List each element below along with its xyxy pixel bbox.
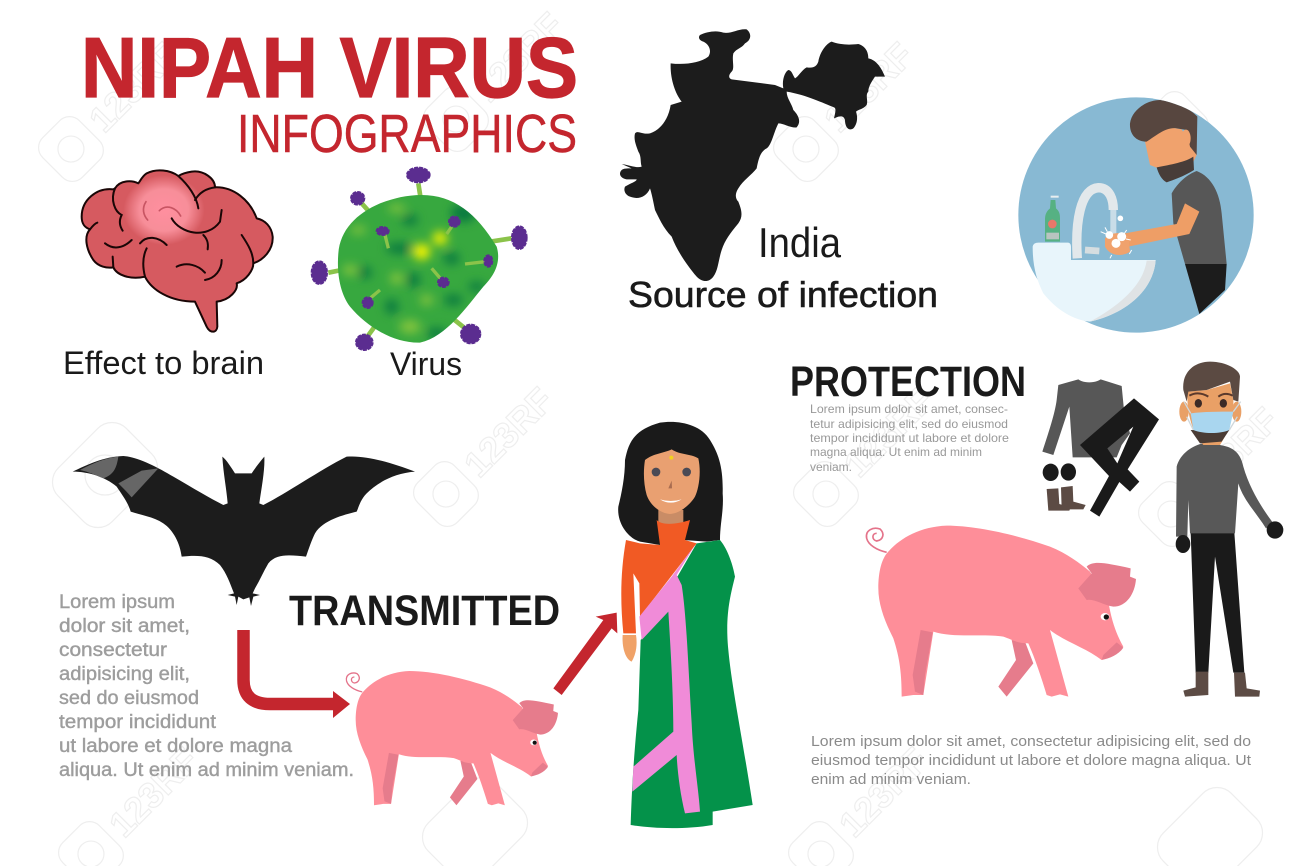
text: transmission description: dolor sit amet,: [59, 616, 190, 637]
soap bottle: [1045, 196, 1060, 242]
heading: protection: PROTECTION: [790, 358, 1026, 406]
virus body: [338, 195, 498, 343]
title: [81, 21, 578, 164]
text: transmission description: [59, 592, 354, 781]
infographic canvas: 123RF: [101, 739, 206, 845]
trousers: [1080, 398, 1159, 517]
arrow: pig to human: [553, 613, 617, 695]
icon: brain: [82, 170, 273, 332]
subheading: Infographics: INFOGRAPHICS: [237, 104, 577, 164]
illustration: man in mask: [1176, 362, 1283, 697]
icon: small pig: [346, 671, 558, 805]
text: bottom description: [811, 734, 1251, 788]
icon: large pig: [866, 526, 1136, 697]
infographic canvas: 123RF: [816, 34, 921, 140]
sweater: [1176, 443, 1273, 537]
text: transmission description: tempor incididunt: [59, 712, 217, 733]
text: protection description: veniam.: [810, 460, 852, 474]
boots: [1047, 486, 1086, 511]
illustration: woman in sari: [618, 422, 753, 828]
foam: [1101, 216, 1132, 258]
infographic canvas: 123RF: [466, 4, 571, 110]
gloves: [1176, 521, 1283, 553]
text: bottom description: Lorem ipsum dolor sit amet, consectetur adipisicing elit, sed do: [811, 734, 1251, 750]
arrow: bat to pig: [244, 630, 350, 718]
infographic canvas: 123RF: [456, 379, 561, 485]
label: India: India: [758, 219, 842, 266]
icon: bat: [73, 456, 415, 606]
text: transmission description: ut labore et dolore magna: [59, 736, 292, 757]
text: transmission description: adipisicing elit,: [59, 664, 190, 685]
infographic canvas: 123RF: [836, 379, 941, 485]
label: virus: Virus: [390, 346, 462, 382]
faucet: [1077, 188, 1113, 258]
man: [1105, 100, 1227, 314]
illustration: hand washing: [1018, 97, 1254, 333]
text: protection description: [810, 402, 1009, 474]
infographic canvas: 123RF: [831, 739, 936, 845]
text: protection description: magna aliqua. Ut enim ad minim: [810, 445, 982, 459]
neck: [658, 510, 683, 525]
text: transmission description: sed do eiusmod: [59, 688, 199, 709]
sari: [631, 540, 753, 828]
face: [644, 449, 700, 514]
icon: protective clothing: [1042, 379, 1159, 517]
hair: [618, 422, 723, 545]
text: protection description: Lorem ipsum dolor sit amet, consec-: [810, 402, 1008, 416]
text: protection description: tempor incididunt ut labore et dolore: [810, 431, 1009, 445]
sink: [1033, 243, 1156, 322]
text: bottom description: enim ad minim veniam.: [811, 772, 971, 788]
text: transmission description: consectetur: [59, 640, 168, 661]
heading: transmitted: TRANSMITTED: [289, 587, 560, 635]
blouse: [621, 520, 697, 633]
text: protection description: tetur adipisicing elit, sed do eiusmod: [810, 417, 1008, 431]
trousers: [1191, 533, 1244, 673]
infographic canvas: 123RF: [81, 34, 186, 140]
text: bottom description: eiusmod tempor incididunt ut labore et dolore magna aliqua. Ut: [811, 753, 1251, 769]
sari border: [632, 545, 700, 813]
icon: virus: [312, 168, 527, 350]
text: transmission description: Lorem ipsum: [59, 592, 175, 613]
boots: [1183, 672, 1208, 697]
label: effect to brain: Effect to brain: [63, 345, 264, 381]
sweater: [1042, 379, 1130, 457]
gloves: [1043, 463, 1076, 481]
virus spikes: [312, 168, 527, 350]
label: source of infection: Source of infection: [628, 274, 938, 315]
heading: Nipah Virus: NIPAH VIRUS: [81, 21, 578, 116]
infographic canvas: 123RF: [1181, 399, 1286, 505]
head: [1179, 362, 1241, 445]
map: India: [620, 29, 885, 281]
text: transmission description: aliqua. Ut enim ad minim veniam.: [59, 760, 354, 781]
hand: [623, 635, 637, 662]
